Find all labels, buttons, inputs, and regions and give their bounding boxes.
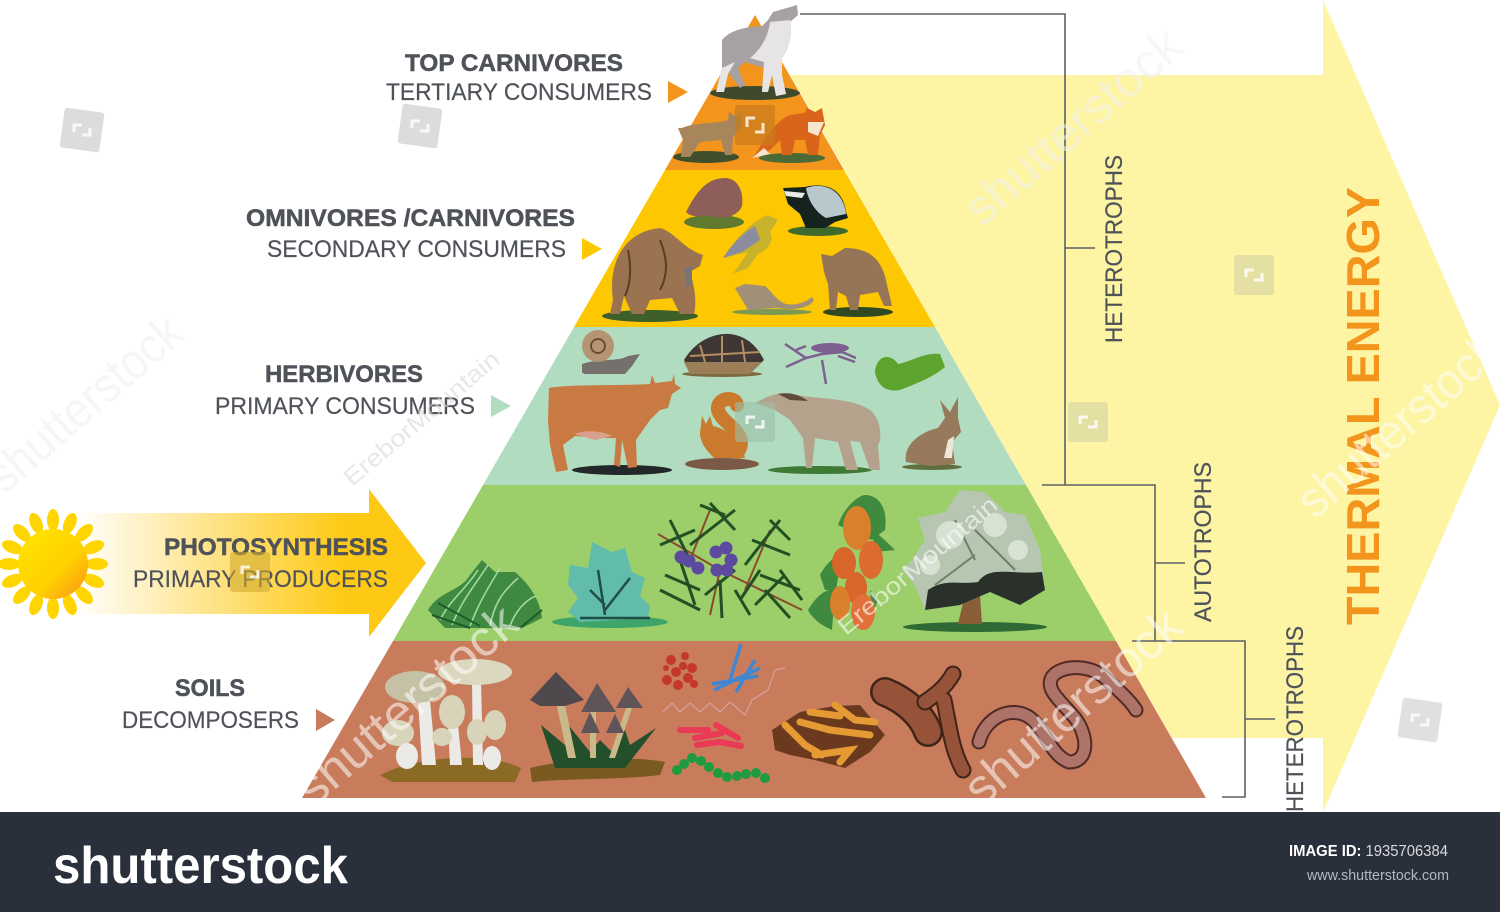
icon: mole: [684, 178, 744, 229]
tier: primary producers: [393, 485, 1116, 641]
icon: squirrel: [685, 399, 759, 470]
icon: tortoise: [682, 334, 764, 377]
icon: red rods: [680, 725, 741, 746]
icon: dark mushrooms: [530, 672, 665, 782]
label: soils: DECOMPOSERS: [122, 707, 299, 734]
icon: rat: [732, 284, 814, 315]
marker: tertiary arrow: [668, 81, 688, 103]
label: photosynthesis: PRIMARY PRODUCERS: [133, 566, 388, 593]
tier: decomposers: [302, 641, 1206, 798]
label: autotrophs: AUTOTROPHS: [1190, 462, 1217, 622]
website: www.shutterstock.com: [1306, 867, 1449, 884]
icon: lynx: [673, 112, 741, 163]
watermarks: shutterstock: [952, 16, 1194, 236]
label: herbivores: HERBIVORES: [265, 361, 423, 388]
label: photosynthesis: PHOTOSYNTHESIS: [164, 534, 388, 561]
marker: secondary arrow: [582, 238, 602, 260]
pyramid: [302, 15, 1206, 798]
label: top carnivores: TERTIARY CONSUMERS: [386, 79, 652, 106]
logo: shutterstock: shutterstock: [53, 837, 348, 895]
bracket lines: [800, 14, 1275, 797]
label: top carnivores: TOP CARNIVORES: [405, 50, 623, 77]
label: omnivores: [246, 205, 575, 263]
tier: secondary consumers: [574, 170, 935, 327]
watermarks: shutterstock: [952, 596, 1194, 816]
icon: red cocci: [662, 652, 698, 690]
image id: IMAGE ID: 1935706384: [1289, 843, 1448, 860]
icon: caterpillar: [875, 354, 945, 390]
icon: snail: [582, 330, 640, 374]
label: herbivores: [215, 361, 475, 420]
label: heterotrophs lower: HETEROTROPHS: [1282, 626, 1309, 812]
icon: white mushrooms: [380, 659, 521, 782]
icon: beetle: [785, 343, 856, 384]
icon: fox: [752, 108, 825, 163]
icon: tree: [902, 490, 1047, 632]
icon: badger: [783, 185, 848, 236]
icon: millipede: [885, 674, 963, 770]
marker: soils arrow: [316, 709, 335, 731]
tier: top carnivores: [665, 15, 844, 170]
watermarks: EreborMountain: [339, 346, 505, 492]
tier: primary consumers: [483, 327, 1026, 485]
icon: mango branch: [808, 495, 895, 630]
icon: blue rods: [712, 644, 760, 692]
label: herbivores: PRIMARY CONSUMERS: [215, 393, 475, 420]
label: photosynthesis: [133, 534, 388, 593]
icon: rabbit: [902, 397, 962, 470]
icon: wolf: [710, 5, 800, 100]
label: soils: SOILS: [175, 675, 245, 702]
icon: juniper branch: [658, 503, 802, 618]
label: heterotrophs upper: HETEROTROPHS: [1101, 155, 1128, 343]
icon: grass: [428, 560, 542, 628]
label: omnivores: SECONDARY CONSUMERS: [267, 236, 566, 263]
icon: spirilla: [663, 668, 785, 715]
watermarks: shutterstock: [284, 593, 530, 816]
icon: bird: [723, 215, 778, 274]
label: soils: [122, 675, 299, 734]
icon: bear: [602, 228, 703, 322]
icon: boar: [821, 248, 893, 317]
label: top carnivores: [386, 50, 652, 106]
thermal energy arrow: [790, 0, 1500, 812]
label: omnivores: OMNIVORES /CARNIVORES: [246, 205, 575, 232]
marker: primary arrow: [491, 395, 511, 417]
photosynthesis arrow: [75, 489, 426, 637]
icon: earthworm: [979, 668, 1136, 762]
icon: shrub: [552, 542, 668, 628]
label: thermal energy: THERMAL ENERGY: [1337, 187, 1389, 625]
icon: sun: [0, 509, 108, 619]
watermarks: EreborMountain: [833, 491, 1003, 641]
icon: orange worms: [772, 705, 885, 768]
icon: tapir: [755, 393, 880, 474]
footer bar: [0, 812, 1500, 912]
icon: green chain: [672, 753, 770, 783]
icon: cow: [548, 374, 681, 475]
